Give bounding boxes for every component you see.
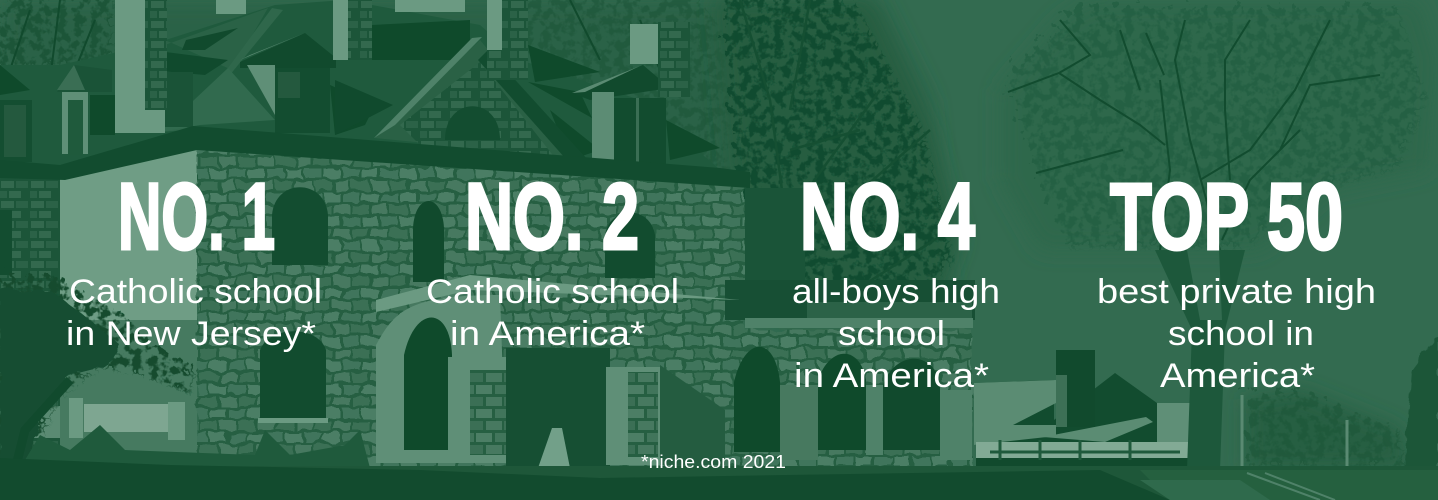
tree: right side tree canopy — [1000, 0, 1438, 250]
heading: NO. 4: NO. 4 — [800, 164, 975, 270]
lower right building — [974, 350, 1192, 470]
description: school — [838, 315, 945, 353]
gable over the main wall — [374, 37, 588, 160]
description: America* — [1160, 357, 1315, 395]
right dormer — [572, 65, 670, 164]
trunks, lamp posts and shrubs at right — [1155, 250, 1438, 480]
windows — [0, 187, 655, 423]
description: school in — [1168, 315, 1314, 353]
cornice — [0, 126, 750, 188]
description: best private high — [1097, 273, 1376, 311]
description: all-boys high — [792, 273, 1000, 311]
tree: central tree mass — [715, 0, 960, 330]
heading: TOP 50: TOP 50 — [1110, 164, 1343, 270]
lawn — [0, 458, 1438, 500]
stat: No. 4 all-boys high school in America — [792, 164, 1000, 395]
heading: NO. 1: NO. 1 — [118, 164, 275, 270]
balustrade — [20, 398, 185, 440]
stat: Top 50 best private high school in America — [1097, 164, 1376, 395]
stat: No. 1 Catholic school in New Jersey — [66, 164, 322, 353]
balcony and upper arcade at right of the building — [725, 188, 975, 328]
description: in America* — [794, 357, 989, 395]
shrubs — [25, 425, 370, 468]
description: in New Jersey* — [66, 315, 316, 353]
footnote: source: *niche.com 2021 — [641, 452, 786, 472]
heading: NO. 2: NO. 2 — [465, 164, 639, 270]
tree in foreground, lower left — [0, 275, 200, 490]
chimneys — [115, 0, 690, 133]
dark roof shadows and dormers — [0, 8, 720, 162]
description: Catholic school — [69, 273, 322, 311]
stone walls — [0, 146, 972, 470]
description: in America* — [450, 315, 645, 353]
slate roof — [0, 0, 720, 180]
stat: No. 2 Catholic school in America — [426, 164, 679, 353]
entrance arches — [376, 275, 972, 468]
bare trees behind the building, top left and top centre — [0, 0, 950, 300]
description: Catholic school — [426, 273, 679, 311]
